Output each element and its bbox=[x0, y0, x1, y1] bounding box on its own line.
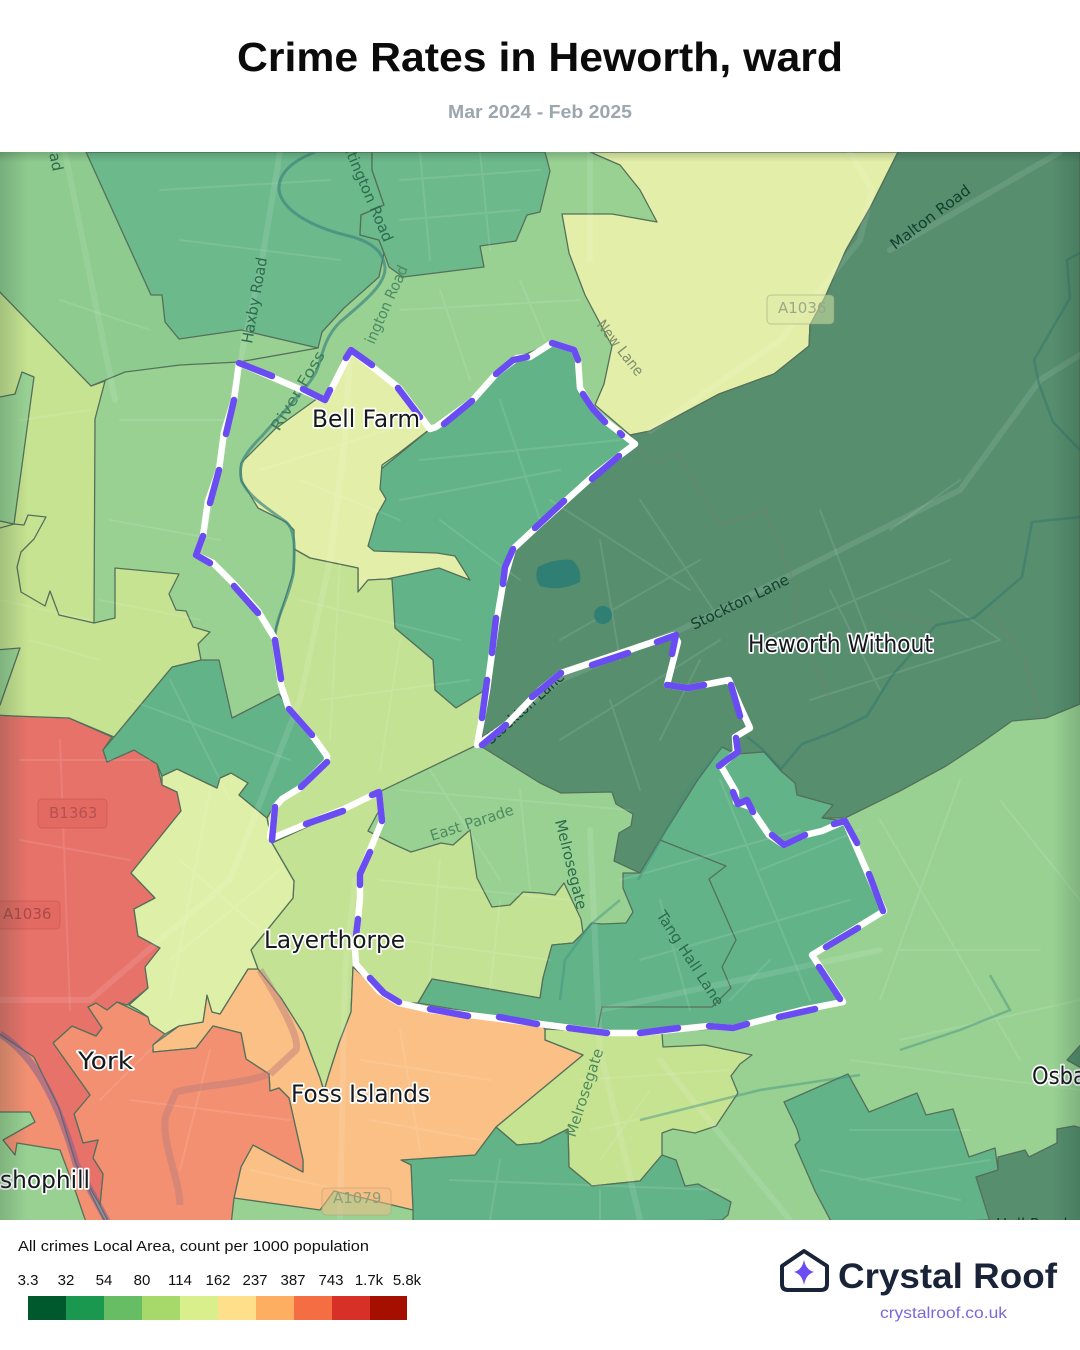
region: north medium green east bbox=[360, 152, 550, 277]
label: Foss Islands: Foss Islands bbox=[291, 1080, 430, 1108]
label: Huntington Road south: ington Road bbox=[361, 263, 412, 347]
region: far-west green sliver bbox=[0, 648, 20, 705]
region: east edge dark bbox=[1066, 1044, 1080, 1068]
Foss in the city bbox=[165, 970, 297, 1205]
label: Haxby Road: Haxby Road bbox=[238, 256, 271, 345]
ward outline purple dashes bbox=[196, 343, 883, 1033]
region: south-east medium green bbox=[784, 1074, 998, 1225]
label: Road (clipped top-left): Road bbox=[41, 132, 67, 173]
internal dark boundary bbox=[635, 444, 1040, 718]
legend tick labels: 80 bbox=[134, 1272, 150, 1289]
roads: faint street network bbox=[0, 152, 1080, 1220]
river: Ouse strip bbox=[0, 1034, 112, 1230]
label: Bell Farm: Bell Farm bbox=[312, 405, 420, 433]
place labels bbox=[0, 405, 1080, 1194]
label: Hull Road: Hull Road bbox=[996, 1215, 1068, 1233]
region: Bell Farm pale yellow bbox=[241, 350, 470, 592]
legend tick labels: 162 bbox=[205, 1272, 231, 1289]
region: north-west green bbox=[0, 152, 241, 386]
subtitle: date range: Mar 2024 - Feb 2025 bbox=[448, 102, 632, 122]
region: Heworth Without dark green bbox=[479, 152, 1080, 873]
legend colour scale bbox=[28, 1296, 407, 1320]
map base: light green areas bbox=[0, 152, 1080, 1220]
region: south-east dark bbox=[976, 1126, 1080, 1225]
region: west lime bbox=[0, 287, 210, 737]
pond: large bbox=[536, 560, 580, 588]
label: Heworth Without: Heworth Without bbox=[748, 630, 933, 658]
label: Melrosegate north: Melrosegate bbox=[551, 818, 591, 911]
region: south medium green bbox=[404, 1127, 732, 1220]
legend tick labels: 54 bbox=[96, 1272, 112, 1289]
stream: east of ward bbox=[747, 253, 1080, 769]
stream: Tang Hall beck bbox=[560, 747, 1010, 1120]
major roads bbox=[0, 152, 1080, 1220]
legend bbox=[18, 1238, 422, 1320]
title: Crime Rates in Heworth, ward bbox=[237, 34, 843, 80]
label: Stockton Lane: Stockton Lane bbox=[688, 571, 792, 634]
road shield: B1363: B1363 bbox=[49, 804, 97, 822]
label: Malton Road: Malton Road bbox=[887, 181, 974, 253]
region: Layerthorpe lime bbox=[251, 792, 583, 1091]
label: Tang Hall Lane: Tang Hall Lane bbox=[652, 907, 728, 1009]
logo: Crystal Roof bbox=[782, 1251, 1057, 1322]
legend tick labels: 114 bbox=[168, 1272, 192, 1289]
region: pale lime west of Foss bbox=[129, 769, 294, 1034]
icon: house with star bbox=[782, 1251, 827, 1290]
region: Tang Hall medium green bbox=[418, 747, 884, 1033]
pond: small bbox=[594, 606, 612, 624]
label: Layerthorpe: Layerthorpe bbox=[264, 926, 405, 954]
legend tick labels: 1.7k bbox=[355, 1272, 384, 1289]
road shield: A1079: A1079 bbox=[333, 1189, 381, 1207]
label: Stockton Lane south: Stockton Lane bbox=[482, 668, 568, 748]
road shield: A1036 east: A1036 bbox=[778, 299, 826, 317]
logo wordmark: Crystal Roof bbox=[838, 1257, 1057, 1296]
label: Melrosegate south: Melrosegate bbox=[562, 1046, 607, 1139]
region: city centre red bbox=[0, 715, 181, 1205]
region: central medium green bbox=[368, 343, 635, 708]
region: south medium lime bbox=[496, 1029, 752, 1186]
label: Huntington Road north: Huntington Road bbox=[331, 121, 397, 245]
label: Bishophill (clipped): shophill bbox=[0, 1166, 90, 1194]
region: north medium green bbox=[86, 152, 384, 348]
region: Foss Islands peach bbox=[153, 967, 583, 1210]
boundary: west lime interior bbox=[0, 515, 94, 623]
road shield: B1363 bbox=[38, 799, 107, 828]
label: York: York bbox=[77, 1047, 133, 1075]
region: far-west green wedge bbox=[0, 372, 34, 524]
legend tick labels: 743 bbox=[318, 1272, 344, 1289]
road shield: A1079 bbox=[322, 1188, 391, 1215]
label: East Parade: East Parade bbox=[428, 801, 516, 845]
boundary: north-west divider bbox=[91, 348, 318, 386]
region: west medium green bbox=[103, 660, 329, 818]
label: New Lane: New Lane bbox=[593, 316, 648, 379]
ponds bbox=[536, 560, 612, 624]
river: Foss bbox=[240, 152, 385, 635]
road shield: A1036 west: A1036 bbox=[3, 905, 51, 923]
legend tick labels bbox=[18, 1272, 422, 1289]
legend tick labels: 387 bbox=[280, 1272, 306, 1289]
legend tick labels: 237 bbox=[242, 1272, 268, 1289]
road shield: A1036 east bbox=[767, 295, 834, 324]
legend title: All crimes Local Area, count per 1000 population bbox=[18, 1238, 369, 1255]
label: River Foss: River Foss bbox=[267, 347, 329, 434]
choropleth regions bbox=[0, 152, 1080, 1230]
logo url: crystalroof.co.uk bbox=[880, 1305, 1008, 1322]
road shield: A1036 west bbox=[0, 901, 60, 929]
legend tick labels: 32 bbox=[58, 1272, 74, 1289]
region: York salmon bbox=[53, 1002, 303, 1225]
minor streets bbox=[0, 152, 1080, 1220]
road labels bbox=[41, 121, 1068, 1233]
region: north-east pale yellow bbox=[562, 152, 898, 435]
region: Tang Hall inner boundary bbox=[598, 840, 736, 1027]
ward outline white bbox=[196, 343, 884, 1033]
ward boundary: Heworth bbox=[196, 343, 884, 1033]
region: central lime bbox=[267, 549, 485, 843]
legend tick labels: 3.3 bbox=[18, 1272, 38, 1289]
region: Bishophill salmon bbox=[0, 1031, 107, 1225]
map edge vignette bbox=[0, 152, 1080, 1220]
legend tick labels: 5.8k bbox=[393, 1272, 422, 1289]
